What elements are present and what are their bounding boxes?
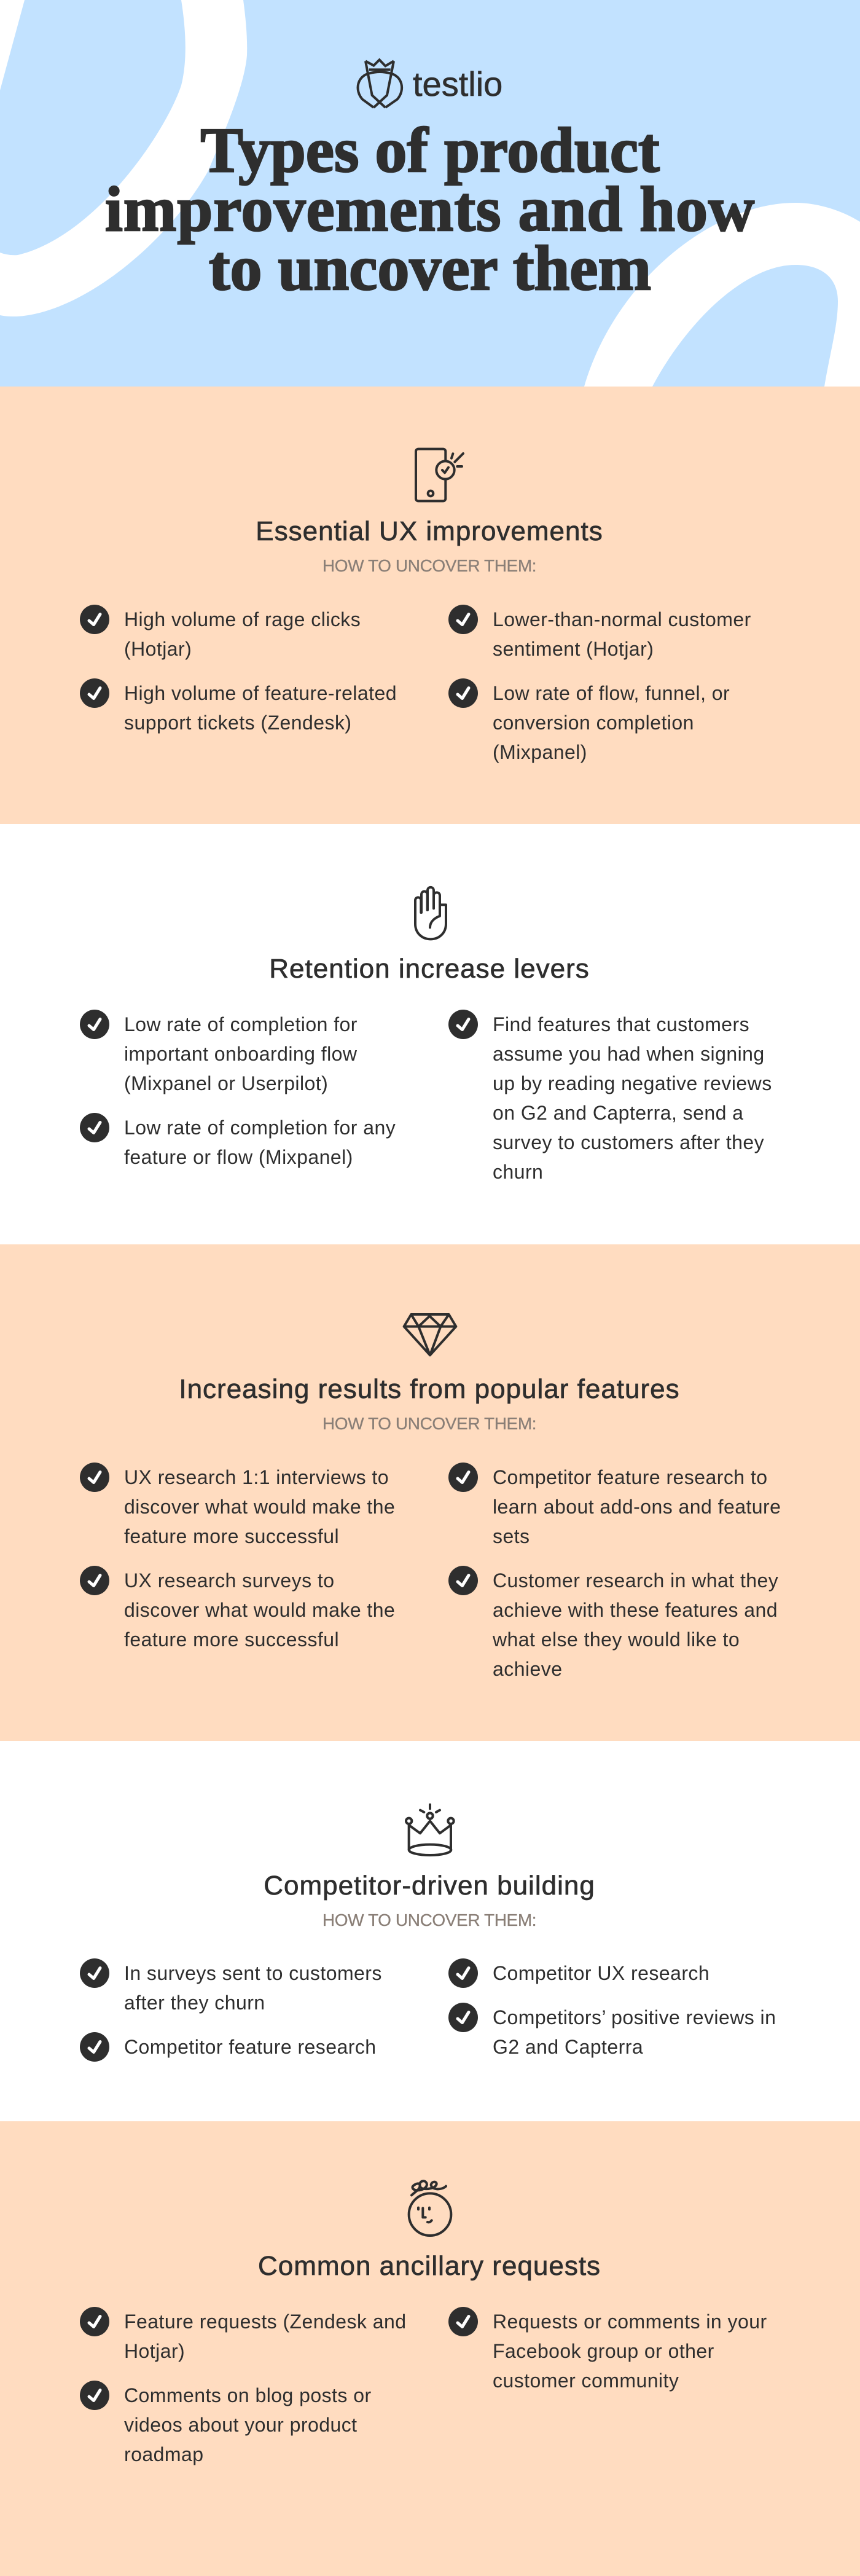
- item: achieve with these features and: [493, 1599, 778, 1621]
- icon: phone with check: [415, 447, 464, 503]
- item: Low rate of flow, funnel, or: [493, 682, 730, 704]
- header panel: [0, 0, 860, 387]
- icon: smiling face with curly hair: [408, 2180, 452, 2237]
- item: [80, 678, 397, 734]
- item: customer community: [493, 2370, 679, 2392]
- item: sentiment (Hotjar): [493, 638, 654, 660]
- item: [448, 1010, 772, 1183]
- title: Types of product: [200, 115, 660, 186]
- panel: essential UX improvements: [0, 387, 860, 824]
- icon: raised hand: [414, 886, 447, 940]
- item: [448, 1958, 710, 1988]
- item: churn: [493, 1161, 543, 1183]
- item: Low rate of completion for: [124, 1013, 358, 1035]
- item: achieve: [493, 1658, 562, 1680]
- item: High volume of rage clicks: [124, 608, 361, 630]
- item: feature more successful: [124, 1525, 339, 1547]
- item: G2 and Capterra: [493, 2036, 643, 2058]
- item: [80, 1463, 395, 1547]
- item: survey to customers after they: [493, 1131, 764, 1153]
- item: (Mixpanel or Userpilot): [124, 1072, 328, 1094]
- item: (Mixpanel): [493, 741, 587, 763]
- icon: crowned heart logo mark: [356, 58, 403, 109]
- panel: retention increase levers: [0, 824, 860, 1244]
- item: Low rate of completion for any: [124, 1117, 396, 1139]
- item: (Hotjar): [124, 638, 192, 660]
- item: Customer research in what they: [493, 1569, 778, 1592]
- item: [448, 1566, 778, 1680]
- icon: diamond: [403, 1313, 457, 1357]
- item: Facebook group or other: [493, 2340, 714, 2362]
- item: Find features that customers: [493, 1013, 749, 1035]
- item: [80, 1010, 358, 1094]
- title: improvements and how: [105, 174, 755, 245]
- heading: Essential UX improvements: [256, 516, 603, 546]
- item: [448, 2307, 767, 2392]
- item: [80, 2032, 377, 2062]
- item: learn about add-ons and feature: [493, 1496, 781, 1518]
- item: High volume of feature-related: [124, 682, 397, 704]
- item: In surveys sent to customers: [124, 1962, 382, 1984]
- item: up by reading negative reviews: [493, 1072, 772, 1094]
- item: [80, 2307, 407, 2362]
- item: Comments on blog posts or: [124, 2384, 372, 2406]
- item: roadmap: [124, 2443, 203, 2465]
- item: feature more successful: [124, 1628, 339, 1651]
- item: [80, 2381, 372, 2465]
- subheading: HOW TO UNCOVER THEM:: [322, 1414, 536, 1433]
- heading: Increasing results from popular features: [179, 1374, 680, 1404]
- item: feature or flow (Mixpanel): [124, 1146, 353, 1168]
- subheading: HOW TO UNCOVER THEM:: [322, 556, 536, 575]
- icon: crown: [405, 1803, 455, 1856]
- item: [80, 605, 361, 660]
- item: important onboarding flow: [124, 1043, 357, 1065]
- item: [80, 1566, 395, 1651]
- logo: testlio: [356, 58, 502, 109]
- item: [80, 1113, 396, 1168]
- item: what else they would like to: [493, 1628, 740, 1651]
- item: Feature requests (Zendesk and: [124, 2311, 407, 2333]
- item: support tickets (Zendesk): [124, 712, 351, 734]
- item: Competitor feature research to: [493, 1466, 767, 1488]
- item: on G2 and Capterra, send a: [493, 1102, 743, 1124]
- item: UX research 1:1 interviews to: [124, 1466, 389, 1488]
- item: assume you had when signing: [493, 1043, 765, 1065]
- subheading: HOW TO UNCOVER THEM:: [322, 1910, 536, 1930]
- logo wordmark: testlio: [413, 65, 502, 103]
- item: sets: [493, 1525, 530, 1547]
- item: conversion completion: [493, 712, 694, 734]
- item: Requests or comments in your: [493, 2311, 767, 2333]
- heading: Common ancillary requests: [258, 2251, 601, 2281]
- item: Hotjar): [124, 2340, 185, 2362]
- decorative white swooshes: [0, 0, 860, 387]
- panel: competitor-driven building: [0, 1741, 860, 2121]
- panel: common ancillary requests: [0, 2121, 860, 2576]
- item: [448, 2003, 776, 2058]
- item: discover what would make the: [124, 1599, 395, 1621]
- title: [105, 115, 755, 304]
- item: [448, 1463, 781, 1547]
- item: [80, 1958, 382, 2014]
- item: videos about your product: [124, 2414, 357, 2436]
- item: Lower-than-normal customer: [493, 608, 751, 630]
- item: after they churn: [124, 1992, 265, 2014]
- item: Competitor feature research: [124, 2036, 377, 2058]
- item: discover what would make the: [124, 1496, 395, 1518]
- title: to uncover them: [209, 233, 651, 304]
- heading: Competitor-driven building: [264, 1871, 595, 1901]
- heading: Retention increase levers: [269, 954, 590, 984]
- panel: increasing results from popular features: [0, 1244, 860, 1741]
- item: [448, 678, 730, 763]
- item: Competitors’ positive reviews in: [493, 2006, 776, 2028]
- item: [448, 605, 751, 660]
- item: Competitor UX research: [493, 1962, 710, 1984]
- item: UX research surveys to: [124, 1569, 334, 1592]
